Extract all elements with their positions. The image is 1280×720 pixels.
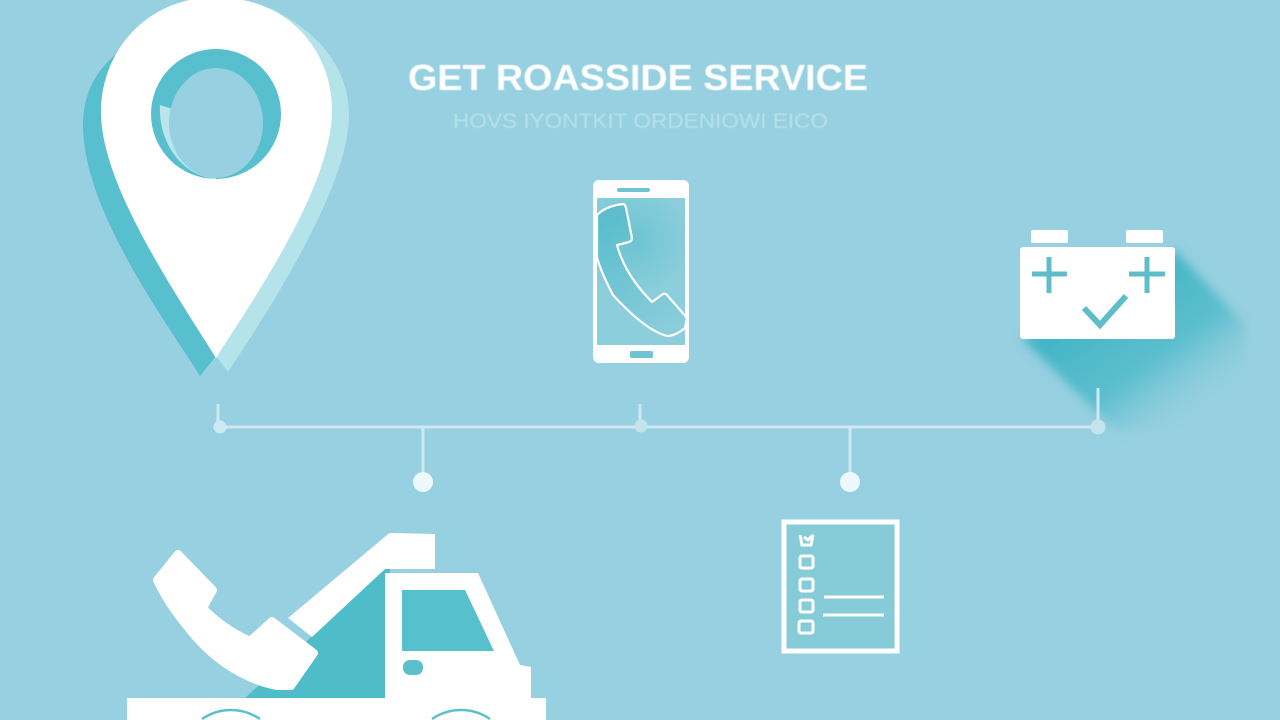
phone handset (157, 554, 314, 686)
subtitle: HOVS IYONTKIT ORDENIOWI EICO (453, 110, 828, 133)
door handle (403, 660, 423, 675)
checkbox 2 (800, 556, 813, 568)
icon: smartphone with handset (593, 180, 689, 363)
handset outline (597, 204, 687, 336)
icon: checklist (784, 522, 897, 651)
cab window (402, 590, 494, 651)
checkbox 4 (800, 600, 813, 612)
truck base (127, 698, 546, 720)
icon: tow truck with handset (127, 533, 546, 720)
truck boom (288, 533, 435, 637)
icon: location pin (83, 0, 349, 376)
phone speaker (617, 188, 650, 192)
wheel arcs (202, 710, 490, 719)
truck cab (385, 573, 531, 700)
checkbox 1 (800, 535, 813, 545)
timeline connector (214, 388, 1106, 492)
icon: car battery (1020, 230, 1245, 430)
checklist lines (823, 597, 884, 615)
phone home button (630, 351, 653, 358)
title: GET ROASSIDE SERVICE (408, 57, 868, 98)
checkbox 5 (799, 621, 813, 633)
checkbox 3 (800, 579, 813, 591)
battery long shadow (1022, 250, 1245, 430)
truck teal bed (245, 569, 390, 698)
